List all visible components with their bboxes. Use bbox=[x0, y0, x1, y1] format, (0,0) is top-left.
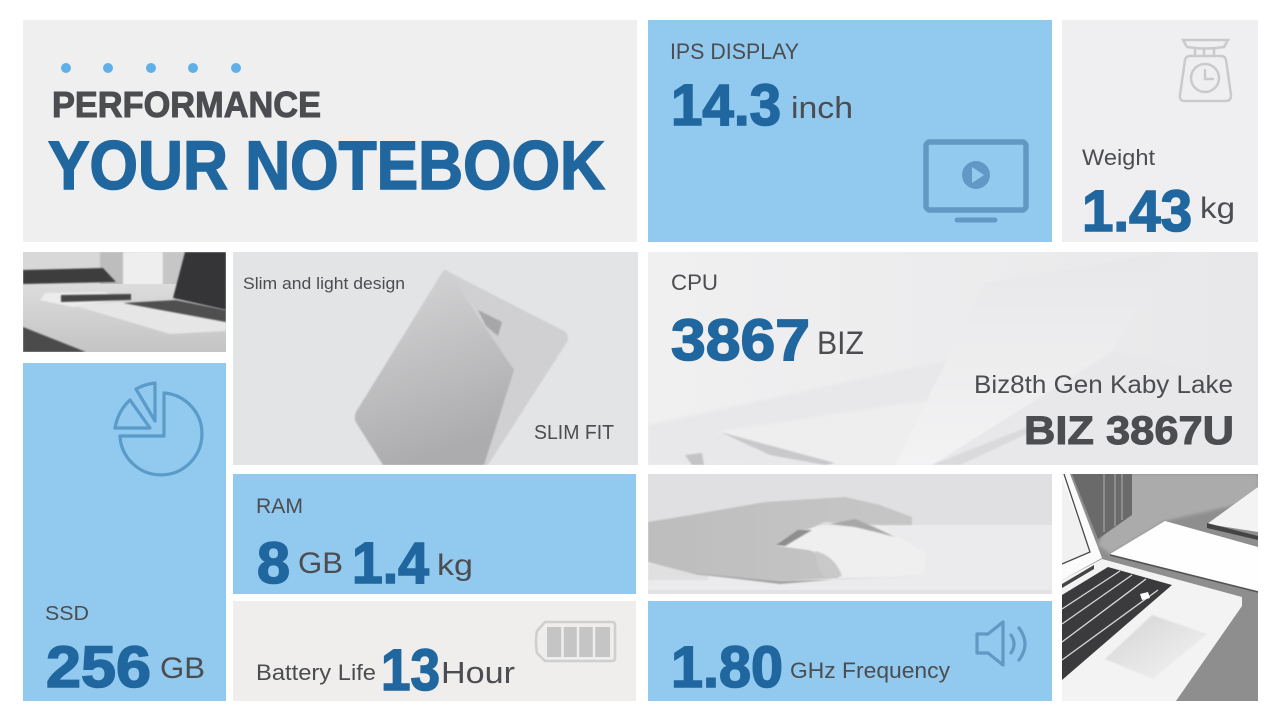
value: 8 GB bbox=[257, 531, 343, 596]
decorative dots bbox=[61, 63, 241, 73]
value: 13 hour: 13 bbox=[381, 638, 440, 703]
icon: battery bbox=[536, 622, 615, 661]
value: 256 GB: 256 bbox=[46, 635, 151, 700]
panel: SSD bbox=[23, 363, 226, 701]
label: IPS display: IPS DISPLAY bbox=[670, 39, 799, 64]
panel: slim and light design bbox=[233, 252, 638, 465]
value: 256 GB bbox=[46, 635, 205, 700]
icon: kitchen scale bbox=[1180, 40, 1231, 101]
panel: RAM bbox=[233, 474, 636, 596]
value: 1.4 kg bbox=[352, 531, 473, 596]
panel: battery life bbox=[233, 601, 636, 703]
caption: slim and light design: Slim and light design bbox=[243, 274, 405, 293]
text: processor model: BIZ 3867U bbox=[1024, 409, 1234, 453]
heading: your notebook: YOUR NOTEBOOK bbox=[48, 127, 605, 204]
caption: slim fit: SLIM FIT bbox=[534, 422, 614, 444]
panel: CPU bbox=[648, 252, 1258, 465]
value: 1.80: 1.80 bbox=[671, 635, 783, 700]
label: GHz frequency: GHz Frequency bbox=[790, 658, 950, 683]
heading: performance: PERFORMANCE bbox=[52, 84, 321, 125]
value: 1.43 kg: kg bbox=[1200, 192, 1235, 225]
panel: IPS display bbox=[648, 20, 1052, 242]
photo: white laptop bbox=[684, 422, 1044, 465]
value: 1.4 kg: 1.4 bbox=[352, 531, 429, 596]
panel: frequency bbox=[648, 601, 1052, 701]
text: processor generation: Biz8th Gen Kaby Lake bbox=[974, 371, 1233, 399]
icon: pie chart bbox=[115, 383, 202, 475]
value: 1.43 kg: 1.43 bbox=[1082, 179, 1192, 244]
value: 14.3 inch: 14.3 bbox=[671, 73, 781, 138]
panel: title bbox=[23, 20, 637, 242]
label: weight: Weight bbox=[1082, 145, 1155, 170]
value: 14.3 inch: inch bbox=[791, 90, 853, 125]
label: SSD: SSD bbox=[45, 603, 89, 625]
photo: folded slim laptop bbox=[355, 270, 568, 465]
value: 8 GB: GB bbox=[298, 547, 343, 580]
photo: hand on mouse bbox=[648, 474, 1052, 594]
value: 13 hour: Hour bbox=[441, 655, 515, 690]
value: 3867 BIZ: 3867 bbox=[671, 308, 810, 373]
value: 256 GB: GB bbox=[160, 652, 205, 685]
photo: desk with laptop bbox=[23, 252, 226, 352]
label: RAM: RAM bbox=[256, 495, 303, 518]
icon: monitor with play button bbox=[926, 142, 1026, 220]
photo: laptop keyboard close-up bbox=[1062, 474, 1258, 701]
panel: weight bbox=[1062, 20, 1258, 244]
label: CPU: CPU bbox=[671, 270, 718, 295]
value: 8 GB: 8 bbox=[257, 531, 290, 596]
icon: speaker bbox=[977, 622, 1025, 665]
value: 3867 BIZ: BIZ bbox=[817, 325, 864, 361]
value: 1.4 kg: kg bbox=[437, 549, 473, 582]
value: 13 hour bbox=[381, 638, 515, 703]
value: 14.3 inch bbox=[671, 73, 853, 138]
value: 3867 BIZ bbox=[671, 308, 864, 373]
label: battery life: Battery Life bbox=[256, 660, 376, 685]
